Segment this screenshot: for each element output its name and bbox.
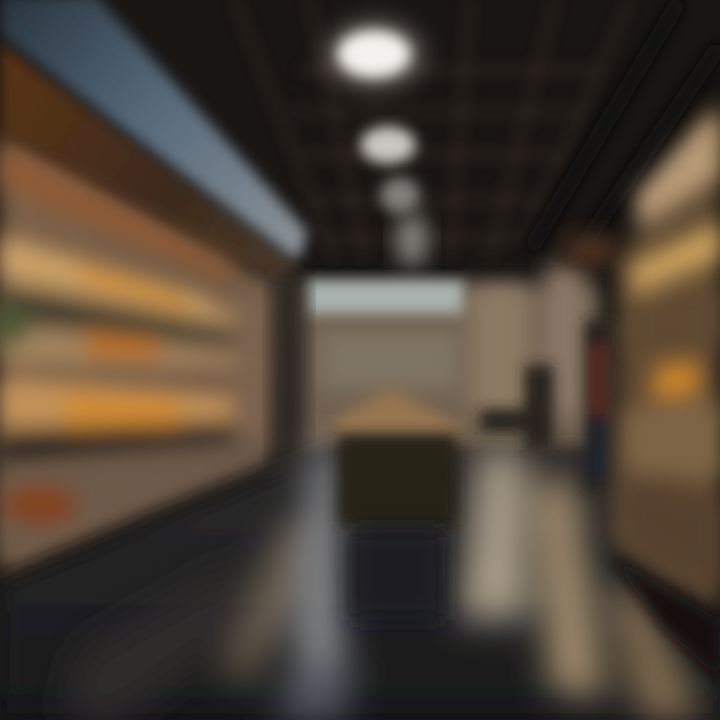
floor (0, 450, 720, 720)
back wall (290, 265, 600, 455)
left wooden top beam (0, 42, 295, 290)
centre display counter (335, 388, 460, 620)
floor reflections (60, 450, 705, 720)
right dark floor edge (610, 555, 720, 680)
left blue-grey fascia (0, 0, 308, 262)
left dark column (274, 275, 304, 485)
ceiling (60, 0, 720, 265)
left shelf unit (0, 0, 308, 575)
ceiling lights (323, 17, 428, 268)
glowing shelf bands (0, 145, 270, 560)
shopper silhouettes (480, 320, 617, 490)
right shelf unit (565, 95, 720, 610)
